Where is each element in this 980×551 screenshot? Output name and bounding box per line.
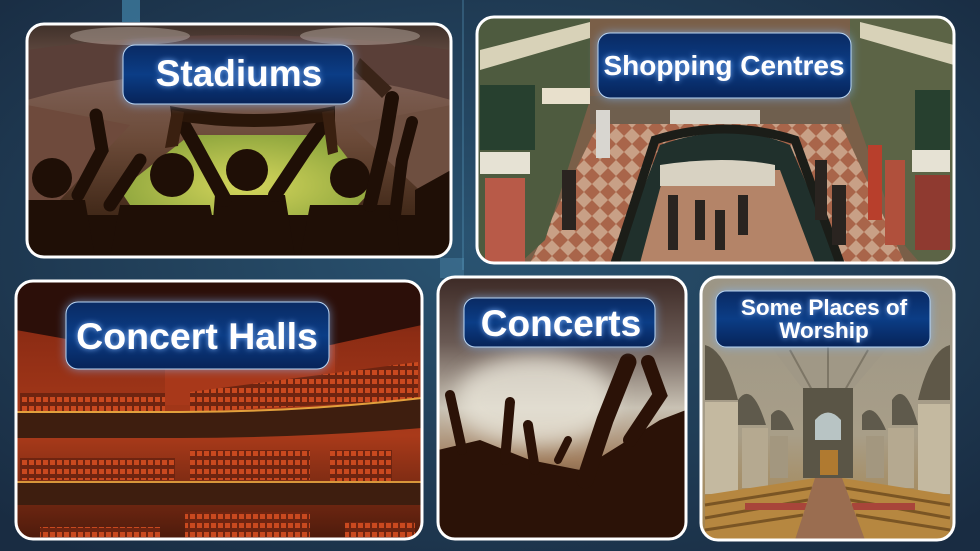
panel: Concert Halls <box>16 281 422 539</box>
label: Some Places of Worship <box>716 291 930 347</box>
lower rail <box>16 482 422 505</box>
pitch <box>124 135 366 215</box>
label: Some Places of Worship: Worship <box>779 318 869 343</box>
label: Shopping Centres <box>598 33 851 98</box>
floor <box>530 124 904 262</box>
label: Some Places of Worship: Some Places of <box>741 295 908 320</box>
vault <box>770 332 890 392</box>
label: Stadiums <box>123 45 353 104</box>
pews <box>705 478 815 540</box>
panel: Concerts <box>438 277 686 539</box>
scarf <box>170 106 335 127</box>
label: Shopping Centres: Shopping Centres <box>603 50 845 81</box>
label: Concerts: Concerts <box>481 303 641 344</box>
left wall <box>477 17 590 263</box>
panel: Stadiums <box>27 24 451 257</box>
label: Stadiums: Stadiums <box>156 53 322 94</box>
panel: Shopping Centres <box>477 17 954 263</box>
mid seats <box>20 458 175 480</box>
balcony rail <box>16 398 422 438</box>
label: Concert Halls: Concert Halls <box>76 315 318 357</box>
panel: Some Places of Worship <box>701 277 954 540</box>
shoppers <box>562 110 905 250</box>
arches <box>705 345 738 400</box>
right wall <box>850 17 954 263</box>
aisle <box>795 478 865 540</box>
crowd <box>438 362 686 539</box>
nave end <box>803 388 853 478</box>
label: Concert Halls <box>66 302 329 369</box>
lower seats <box>185 512 310 539</box>
top back <box>590 96 850 124</box>
stands <box>27 35 451 100</box>
columns <box>705 402 738 494</box>
balcony opening <box>615 132 840 263</box>
flag <box>354 58 392 98</box>
crowd silhouettes <box>27 98 451 257</box>
upper seats <box>20 393 165 411</box>
